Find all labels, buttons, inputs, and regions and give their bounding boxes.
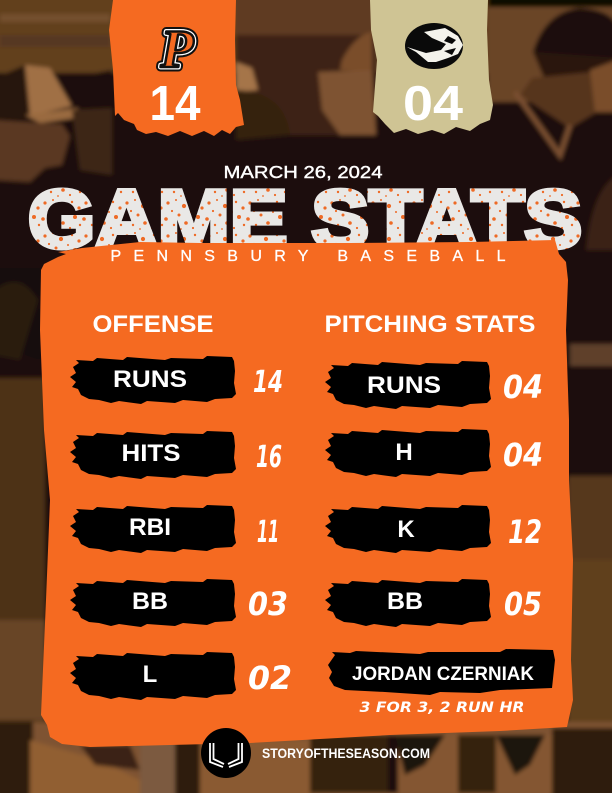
logo: Pennsbury P: P <box>160 19 194 79</box>
pitching row: h <box>325 429 543 477</box>
pitching row: k: 12 <box>508 513 542 551</box>
offense row: hits: 16 <box>256 440 282 475</box>
offense row: runs: 14 <box>253 365 283 400</box>
right strip <box>568 268 612 478</box>
offense row: rbi: RBI <box>129 514 171 541</box>
offense row: runs <box>70 356 283 404</box>
pitching row: k: K <box>397 516 415 543</box>
heading: offense: OFFENSE <box>92 311 214 338</box>
pitching row: k <box>325 505 542 553</box>
sky <box>0 0 492 78</box>
footer brand <box>201 728 430 778</box>
logo: tiger <box>405 23 463 69</box>
player note: 3 FOR 3, 2 RUN HR <box>360 700 524 716</box>
website: STORYOFTHESEASON.COM <box>262 746 430 761</box>
offense row: l <box>70 652 292 700</box>
offense row: rbi: 11 <box>257 515 279 550</box>
pitching row: player of the game: JORDAN CZERNIAK <box>352 664 534 685</box>
left strip <box>0 378 45 723</box>
score: 14: 14 <box>150 77 200 131</box>
right player <box>533 8 612 60</box>
offense row: bb: BB <box>132 588 168 615</box>
logo: Pennsbury P: P <box>160 19 194 79</box>
offense row: l: 02 <box>248 659 292 697</box>
heading: pitching stats: PITCHING STATS <box>324 311 536 338</box>
date: MARCH 26, 2024 <box>224 162 383 182</box>
left player <box>0 64 26 118</box>
orange score banner: Pennsbury <box>109 0 244 136</box>
pitching row: player of the game <box>328 649 555 695</box>
pitching row: runs: 04 <box>503 368 543 406</box>
logo: Pennsbury P: P <box>160 19 194 79</box>
lower strip <box>0 722 612 798</box>
pitching row: h: 04 <box>503 436 543 474</box>
offense row: l: L <box>143 661 157 688</box>
pitching row: bb: 05 <box>504 585 542 623</box>
khaki score banner: opponent <box>370 0 493 134</box>
offense row: bb: 03 <box>248 585 288 623</box>
pitching row: bb: BB <box>387 588 423 615</box>
center heads <box>236 62 258 92</box>
offense row: runs: RUNS <box>113 366 187 393</box>
score: 04: 04 <box>403 77 463 131</box>
offense row: hits <box>70 431 282 479</box>
icon: open book <box>201 728 251 778</box>
pitching row: runs: RUNS <box>367 372 441 399</box>
subtitle: Pennsbury Baseball: PENNSBURY BASEBALL <box>110 248 506 265</box>
pitching row: runs <box>325 361 543 409</box>
orange stats panel <box>40 240 573 747</box>
title: GAME STATS: GAME STATS <box>28 174 582 265</box>
offense row: bb <box>70 579 288 627</box>
offense row: hits: HITS <box>122 440 180 467</box>
offense row: rbi <box>70 505 279 553</box>
pitching row: bb <box>325 579 542 627</box>
pitching row: h: H <box>395 439 413 466</box>
